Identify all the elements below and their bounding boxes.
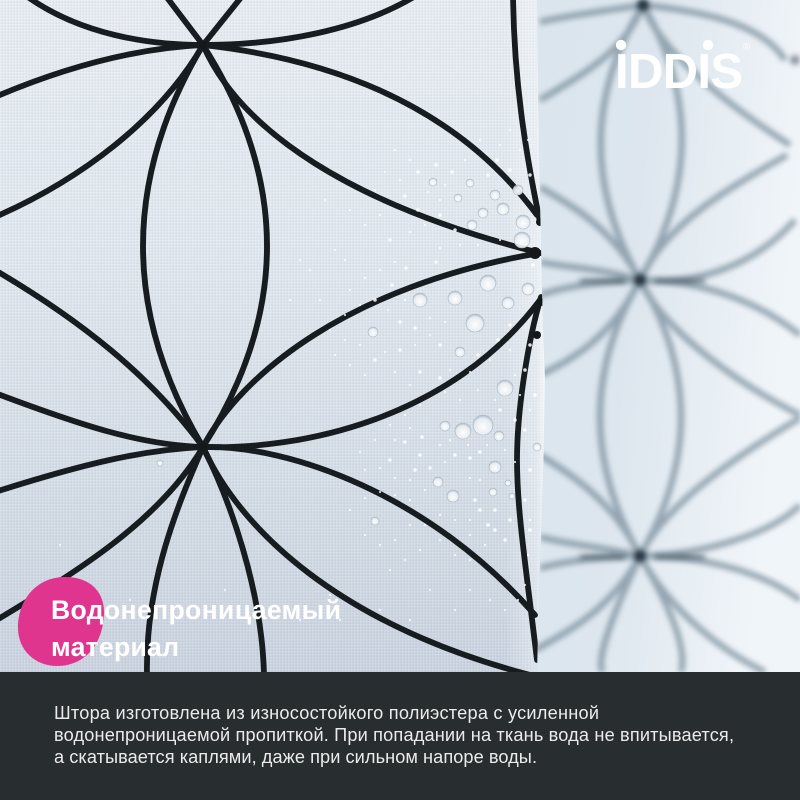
description text: а скатывается каплями, даже при сильном напоре воды. xyxy=(54,747,537,767)
description text: водонепроницаемой пропиткой. При попадании на ткань вода не впитывается, xyxy=(54,725,734,745)
logo: IDDIS: IDDIS xyxy=(615,45,743,99)
logo: IDDIS: ® xyxy=(743,42,751,53)
heading: материал xyxy=(51,632,179,662)
description text xyxy=(54,703,734,767)
bottom description bar xyxy=(0,672,800,800)
fabric background xyxy=(0,0,546,672)
fold highlight xyxy=(518,2,545,672)
water droplets xyxy=(60,130,541,620)
description text: Штора изготовлена из износостойкого полиэстера с усиленной xyxy=(54,703,599,723)
heading xyxy=(51,595,341,662)
curtain line pattern xyxy=(0,0,541,675)
knots at the fold xyxy=(531,218,542,339)
heading: Водонепроницаемый xyxy=(51,595,341,625)
icon: pink blob xyxy=(18,577,104,666)
fabric weave xyxy=(0,0,546,672)
panel: blurred background curtain xyxy=(530,0,800,672)
panel: sharp foreground curtain xyxy=(0,0,546,675)
